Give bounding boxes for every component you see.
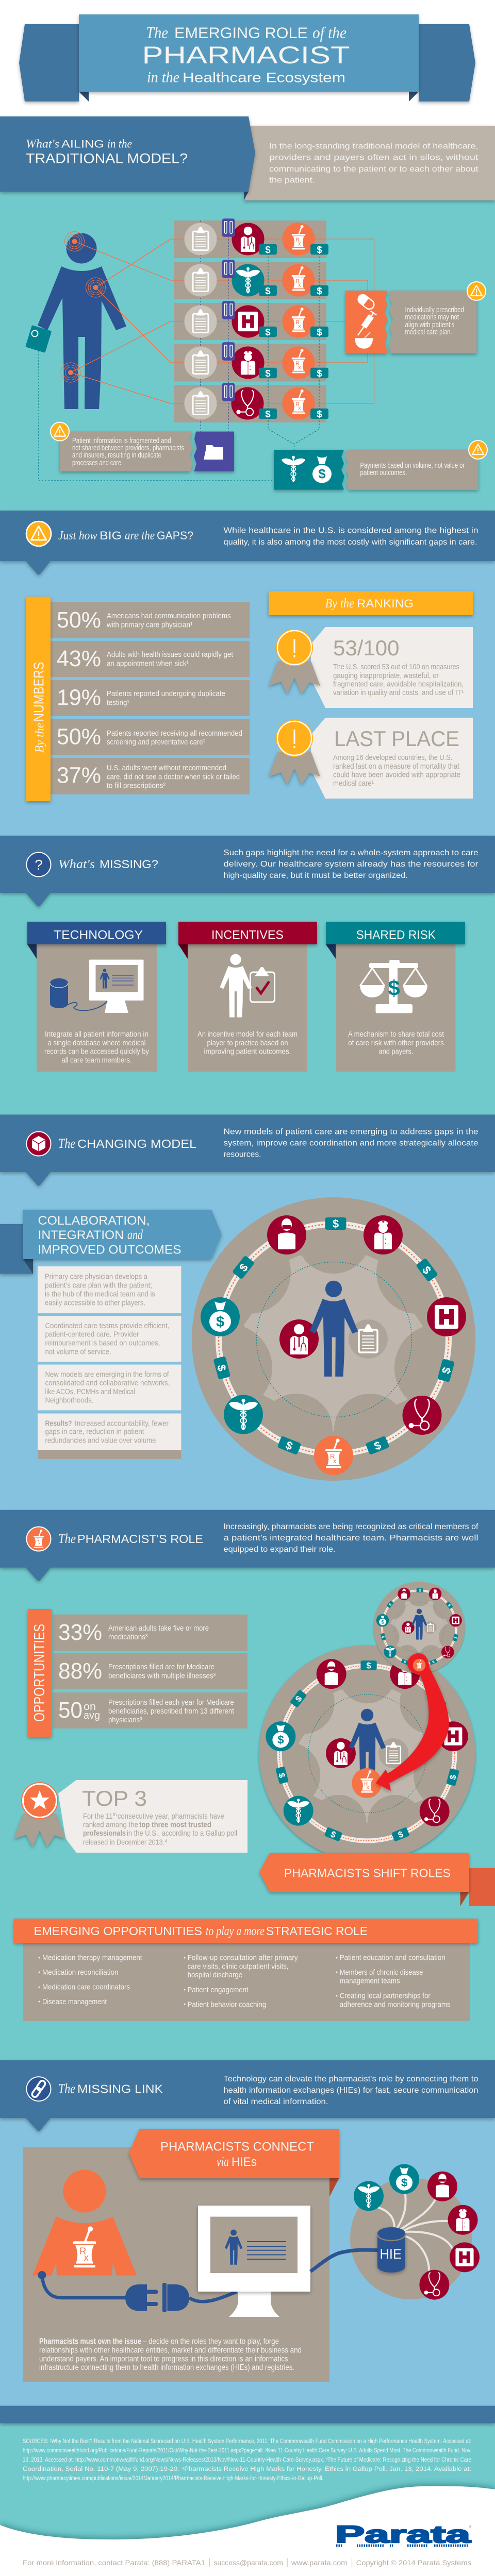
panel: incentives: improving patient outcomes. xyxy=(204,1048,291,1056)
footer wave xyxy=(0,2486,495,2555)
emerging opportunities panel xyxy=(14,1919,478,2021)
footer contact line xyxy=(23,2558,471,2567)
by the numbers panel: 43% xyxy=(57,646,101,671)
section 1 header: what's ailing: What's xyxy=(26,138,59,150)
by the numbers panel: 50% xyxy=(57,607,101,633)
icon: plug and cable xyxy=(38,2271,237,2312)
opportunities panel xyxy=(28,1609,248,1737)
logo: Parata xyxy=(335,2521,471,2548)
section 4 header: changing model xyxy=(0,1115,495,1186)
section 6 header: missing link: Technology can elevate the pharmacist's role by connecting them to xyxy=(224,2075,478,2083)
top 3 callout: th xyxy=(112,1812,117,1817)
section 4 header: changing model: CHANGING MODEL xyxy=(77,1137,196,1150)
icon: pharmacist figure xyxy=(32,2170,137,2276)
emerging opportunities panel: Members of chronic disease xyxy=(340,1968,423,1977)
emerging opportunities panel: hospital discharge xyxy=(188,1971,242,1979)
callout: prescriptions: medical care plan. xyxy=(405,328,452,336)
section 1 header: what's ailing: TRADITIONAL MODEL? xyxy=(26,151,188,166)
opportunities panel: Prescriptions filled are for Medicare xyxy=(108,1663,214,1671)
opportunities panel: beneficiares with multiple illnesses³ xyxy=(108,1672,216,1681)
emerging opportunities panel: Creating local partnerships for xyxy=(340,1992,431,2001)
text cards: improved outcomes xyxy=(38,1266,181,1459)
by the numbers panel: testing¹ xyxy=(107,699,129,707)
by the numbers panel: By the xyxy=(33,723,46,753)
by the numbers panel: Patients reported undergoing duplicate xyxy=(107,689,225,698)
text cards: improved outcomes: not volume of service. xyxy=(45,1348,111,1357)
section 6 header: missing link: of vital medical information. xyxy=(224,2097,328,2106)
text cards: improved outcomes: Results? xyxy=(45,1419,72,1428)
callout: fragmented information: and insurers, resulting in duplicate xyxy=(72,451,161,460)
ribbon: collaboration xyxy=(0,1210,222,1274)
section 1 header: what's ailing: in the xyxy=(107,138,132,150)
arrow: red shift arrow xyxy=(375,1653,449,1791)
section 3 header: missing: What's xyxy=(58,858,95,871)
callout: payments: Payments based on volume, not value or xyxy=(360,462,465,470)
panel: pharmacists connect via HIEs xyxy=(23,2129,339,2382)
panel: pharmacists connect via HIEs: PHARMACISTS CONNECT xyxy=(160,2140,314,2154)
section 2 header: gaps: quality, it is also among the most costly with significant gaps in care. xyxy=(224,538,477,547)
by the ranking panel: fragmented care, avoidable hospitalization, xyxy=(333,680,464,688)
footer white area xyxy=(0,2548,495,2576)
callout: payments: $ xyxy=(318,467,326,482)
section 1 header: what's ailing: In the long-standing traditional model of healthcare, xyxy=(269,142,478,150)
ribbon: collaboration: and xyxy=(127,1227,143,1242)
section 4 header: changing model: New models of patient care are emerging to address gaps in the xyxy=(224,1127,478,1137)
section 5 header: pharmacist's role: a patient's integrated healthcare team. Pharmacists are well xyxy=(224,1534,478,1543)
logo: Parata: Parata xyxy=(335,2521,471,2548)
section 6 header: missing link xyxy=(0,2060,495,2131)
top 3 callout: TOP 3 xyxy=(82,1786,147,1810)
callout: prescriptions: medications may not xyxy=(405,313,459,321)
panel: shared risk xyxy=(326,922,465,1072)
section 6 header: missing link: The xyxy=(58,2081,75,2096)
ribbon: pharmacists shift roles xyxy=(259,1853,495,1906)
section 2 header: gaps: GAPS? xyxy=(157,529,193,542)
title banner: Healthcare Ecosystem xyxy=(183,70,345,86)
by the ranking panel: gauging inappropriate, wasteful, or xyxy=(333,671,439,680)
by the numbers panel xyxy=(26,597,250,801)
panel: incentives: An incentive model for each team xyxy=(197,1030,298,1039)
patient figure with pain points xyxy=(25,232,171,409)
callout: fragmented information xyxy=(51,422,234,471)
section 5 header: pharmacist's role xyxy=(0,1510,495,1581)
emerging opportunities panel: management teams xyxy=(340,1977,400,1986)
icon: monitor xyxy=(198,2206,310,2317)
by the numbers panel: 50% xyxy=(57,724,101,750)
section 6 header: missing link: MISSING LINK xyxy=(77,2082,163,2096)
top 3 callout: For the 11 xyxy=(83,1812,112,1821)
diagram: HIE network: HIE xyxy=(380,2246,402,2262)
text cards: improved outcomes: like ACOs, PCMHs and Medical xyxy=(45,1387,135,1396)
emerging opportunities panel: Follow-up consultation after primary xyxy=(188,1954,298,1962)
panel: technology: TECHNOLOGY xyxy=(54,928,143,942)
callout: prescriptions: Individually prescribed xyxy=(405,306,464,314)
title banner: The xyxy=(146,23,168,42)
by the numbers panel: Americans had communication problems xyxy=(107,612,231,620)
callout: prescriptions: align with patient's xyxy=(405,321,455,329)
text cards: improved outcomes: patient-centered care. Provider xyxy=(45,1330,139,1339)
panel: pharmacists connect via HIEs: HIEs xyxy=(232,2155,257,2169)
top 3 callout: ranked among the xyxy=(83,1820,138,1829)
section 2 header: gaps: While healthcare in the U.S. is considered among the highest in xyxy=(224,527,478,535)
panel: technology: a single database where medical xyxy=(47,1039,145,1047)
diagram: pharmacists shift roles xyxy=(254,1582,480,1861)
emerging opportunities panel: Medication therapy management xyxy=(42,1954,142,1962)
text cards: improved outcomes: Primary care physician develops a xyxy=(45,1273,148,1281)
text cards: improved outcomes: easily accessible to other players. xyxy=(45,1298,145,1308)
panel: pharmacists connect via HIEs: infrastructure connecting them to health information exchanges (HIEs) and registries. xyxy=(39,2363,294,2372)
opportunities panel: 88% xyxy=(58,1658,102,1684)
ribbon: pharmacists shift roles: PHARMACISTS SHIFT ROLES xyxy=(284,1867,451,1880)
panel: technology: all care team members. xyxy=(62,1056,132,1064)
section 1 header: what's ailing: communicating to the patient or to each other about xyxy=(269,165,478,174)
by the ranking panel: ranked last on a measure of mortality that xyxy=(333,762,460,771)
emerging opportunities panel: to play a more xyxy=(206,1924,265,1938)
section 2 header: gaps xyxy=(0,511,495,575)
callout: fragmented information: Patient information is fragmented and xyxy=(72,437,171,445)
section 2 header: gaps: Just how xyxy=(58,529,97,543)
by the numbers panel: screening and preventative care¹ xyxy=(107,738,205,747)
by the ranking panel: could have been avoided with appropriate xyxy=(333,771,460,779)
section 2 header: gaps: BIG xyxy=(100,529,122,542)
opportunities panel: medications³ xyxy=(108,1633,147,1641)
section 1 header: what's ailing: AILING xyxy=(61,139,104,150)
by the ranking panel: By the xyxy=(325,597,354,611)
sources xyxy=(23,2438,471,2482)
footer contact line: Copyright © 2014 Parata Systems xyxy=(356,2558,471,2567)
ribbon: collaboration: IMPROVED OUTCOMES xyxy=(38,1243,182,1257)
title banner: in the xyxy=(147,69,179,86)
divider band xyxy=(0,2406,495,2423)
by the ranking panel xyxy=(269,591,473,799)
panel: pharmacists connect via HIEs: relationships with other healthcare entities, market and differentiate their business and xyxy=(39,2346,302,2355)
section 4 header: changing model: The xyxy=(58,1136,75,1151)
panel: shared risk: SHARED RISK xyxy=(356,928,436,942)
text cards: improved outcomes: consolidated and collaborative networks, xyxy=(45,1379,170,1387)
opportunities panel: 33% xyxy=(58,1620,102,1645)
title banner: of the xyxy=(312,23,346,42)
opportunities panel: American adults take five or more xyxy=(108,1624,209,1633)
panel: shared risk: $ xyxy=(388,976,400,1000)
top 3 callout: consecutive year, pharmacists have xyxy=(118,1812,224,1821)
by the numbers panel: to fill prescriptions² xyxy=(107,782,166,790)
emerging opportunities panel: Medication care coordinators xyxy=(42,1982,130,1991)
text cards: improved outcomes: reimbursement is based on outcomes, xyxy=(45,1338,160,1348)
panel: incentives: INCENTIVES xyxy=(211,928,284,942)
by the ranking panel: Among 16 developed countries, the U.S. xyxy=(333,753,452,762)
emerging opportunities panel: Patient behavior coaching xyxy=(188,2000,266,2009)
by the numbers panel: 37% xyxy=(57,763,101,788)
top 3 callout: in the U.S., according to a Gallup poll xyxy=(127,1829,237,1838)
section 4 header: changing model: system, improve care coordination and more strategically allocate xyxy=(224,1139,478,1148)
by the ranking panel: LAST PLACE xyxy=(334,726,459,751)
ribbon: collaboration: COLLABORATION, xyxy=(38,1214,150,1228)
text cards: improved outcomes: gaps in care, reduction in patient xyxy=(45,1428,144,1436)
opportunities panel: Prescriptions filled each year for Medicare xyxy=(108,1698,234,1707)
top 3 callout: top three most trusted xyxy=(139,1820,211,1829)
diagram: collaborative care model xyxy=(185,1197,482,1481)
footer contact line: success@parata.com xyxy=(213,2558,283,2567)
by the numbers panel: with primary care physician¹ xyxy=(106,620,193,630)
by the numbers panel: care, did not see a doctor when sick or failed xyxy=(107,773,240,781)
section 1 header: what's ailing: the patient. xyxy=(269,176,315,184)
section 1 header: what's ailing xyxy=(0,116,495,200)
panel: technology: Integrate all patient information in xyxy=(45,1030,148,1039)
callout: fragmented information: processes and care. xyxy=(72,459,123,467)
text cards: improved outcomes: is the hub of the medical team and is xyxy=(45,1290,155,1299)
ribbon: collaboration: INTEGRATION xyxy=(38,1228,124,1242)
section 4 header: changing model: resources. xyxy=(224,1150,261,1159)
opportunities panel: OPPORTUNITIES xyxy=(31,1624,48,1722)
title banner: PHARMACIST xyxy=(142,41,350,69)
emerging opportunities panel: Disease management xyxy=(42,1997,107,2006)
emerging opportunities panel: Patient engagement xyxy=(188,1986,249,1994)
sources: Coordination, Serial No. 110-7 (May 9, 2007):19-20. ⁴Pharmacists Receive High Marks for Honesty, Ethics in Gallup Poll. Jan. 13, 2014. Available at: xyxy=(23,2466,471,2472)
section 3 header: missing: delivery. Our healthcare system already has the resources for xyxy=(224,860,478,869)
panel: technology: records can be accessed quickly by xyxy=(44,1048,150,1056)
by the numbers panel: 19% xyxy=(57,685,101,710)
by the numbers panel: U.S. adults went without recommended xyxy=(107,764,226,772)
by the numbers panel: NUMBERS xyxy=(31,662,46,722)
text cards: improved outcomes: Coordinated care teams provide efficient, xyxy=(45,1321,169,1330)
section 5 header: pharmacist's role: Increasingly, pharmacists are being recognized as critical members of xyxy=(224,1522,478,1531)
opportunities panel: on xyxy=(84,1701,96,1713)
callout: payments xyxy=(274,440,487,490)
emerging opportunities panel: EMERGING OPPORTUNITIES xyxy=(34,1924,202,1938)
section 5 header: pharmacist's role: The xyxy=(58,1531,76,1546)
section 3 header: missing xyxy=(0,836,495,907)
panel: pharmacists connect via HIEs: understand payers. An important tool to progress in this direction is an informatics xyxy=(39,2355,288,2364)
text cards: improved outcomes: Increased accountability, fewer xyxy=(75,1419,169,1428)
by the ranking panel: RANKING xyxy=(357,597,414,610)
emerging opportunities panel: adherence and monitoring programs xyxy=(340,2000,451,2009)
emerging opportunities panel: care visits, clinic outpatient visits, xyxy=(188,1962,289,1971)
top 3 callout: released in December 2013.⁴ xyxy=(83,1838,167,1846)
emerging opportunities panel: Medication reconciliation xyxy=(42,1968,119,1977)
by the numbers panel: Patients reported receiving all recommended xyxy=(107,729,242,738)
by the numbers panel: an appointment when sick¹ xyxy=(107,659,189,668)
panel: technology xyxy=(27,922,166,1072)
emerging opportunities panel: Patient education and consultation xyxy=(340,1954,446,1962)
section 3 header: missing: ? xyxy=(35,857,43,873)
footer contact line: For more information, contact Parata: (888) PARATA1 xyxy=(23,2558,205,2567)
panel: shared risk: A mechanism to share total cost xyxy=(348,1030,444,1039)
callout: fragmented information: not shared between providers, pharmacists xyxy=(72,444,184,452)
section 3 header: missing: high-quality care, but it must be better organized. xyxy=(224,871,408,880)
section 6 header: missing link: health information exchanges (HIEs) for fast, secure communication xyxy=(224,2086,478,2095)
text cards: improved outcomes: patient's care plan with the patient; xyxy=(45,1281,152,1290)
section 2 header: gaps: are the xyxy=(125,529,155,543)
callout: payments: patient outcomes. xyxy=(360,469,407,477)
panel: pharmacists connect via HIEs: Pharmacists must own the issue xyxy=(39,2337,141,2346)
text cards: improved outcomes: redundancies and value over volume. xyxy=(45,1436,158,1445)
top 3 callout xyxy=(14,1780,248,1853)
panel: shared risk: of care risk with other providers xyxy=(348,1039,444,1047)
by the ranking panel: medical care¹ xyxy=(333,779,374,788)
section 1 header: what's ailing: providers and payers often act in silos, without xyxy=(269,154,478,162)
diagram: siloed care rows xyxy=(39,218,374,481)
opportunities panel: avg xyxy=(84,1710,100,1721)
logo: Parata: ® xyxy=(469,2525,471,2529)
callout: prescriptions xyxy=(345,282,486,353)
section 5 header: pharmacist's role: equipped to expand their role. xyxy=(224,1545,335,1554)
footer contact line: www.parata.com xyxy=(291,2558,348,2567)
panel: pharmacists connect via HIEs: via xyxy=(217,2154,229,2169)
by the ranking panel: 53/100 xyxy=(333,636,399,660)
opportunities panel: 50 xyxy=(58,1698,82,1723)
diagram: HIE network xyxy=(310,2164,480,2300)
by the ranking panel: variation in quality and costs, and use of IT¹ xyxy=(333,688,464,697)
panel: pharmacists connect via HIEs: – decide on the roles they want to play, forge xyxy=(143,2337,279,2346)
section 5 header: pharmacist's role: PHARMACIST'S ROLE xyxy=(77,1532,203,1546)
emerging opportunities panel: STRATEGIC ROLE xyxy=(266,1924,368,1938)
text cards: improved outcomes: New models are emerging in the forms of xyxy=(45,1370,169,1379)
section 3 header: missing: Such gaps highlight the need for a whole-system approach to care xyxy=(224,849,478,857)
text cards: improved outcomes: Neighborhoods. xyxy=(45,1396,94,1404)
panel: shared risk: and payers. xyxy=(378,1048,414,1056)
by the numbers panel: Adults with health issues could rapidly get xyxy=(107,650,234,659)
title banner: EMERGING ROLE xyxy=(174,25,308,42)
opportunities panel: physicians³ xyxy=(108,1716,142,1724)
by the ranking panel: The U.S. scored 53 out of 100 on measures xyxy=(333,663,459,671)
sources: http://www.pharmacytimes.com/publications/issue/2014/January2014/Pharmacists-Receive-High-Marks-for-Honesty-Ethics-in-Gallup-Poll. xyxy=(23,2476,323,2482)
panel: incentives xyxy=(178,922,317,1072)
top 3 callout: professionals xyxy=(83,1829,126,1838)
title banner xyxy=(19,14,475,101)
section 3 header: missing: MISSING? xyxy=(100,858,158,871)
panel: incentives: player to practice based on xyxy=(207,1039,288,1047)
opportunities panel: beneficiaries, prescribed from 13 different xyxy=(108,1707,235,1716)
